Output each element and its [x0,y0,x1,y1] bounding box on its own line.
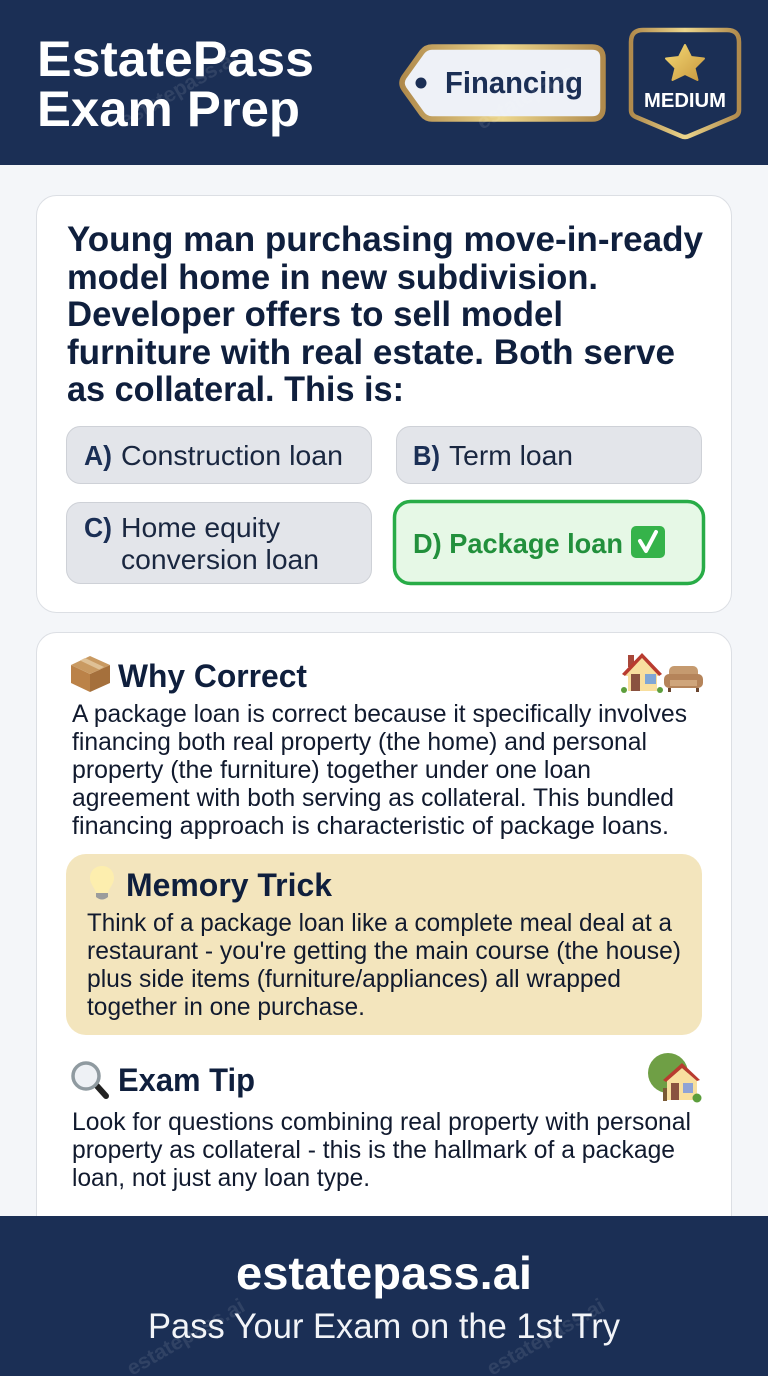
option A [66,426,372,484]
category tag: Financing: Financing [445,65,583,100]
exam tip text [72,1108,691,1192]
question text: Young man purchasing move-in-ready [67,220,704,259]
option A: A) [84,440,112,471]
category tag: Financing [402,47,603,119]
icon: package [71,656,110,692]
memory trick text: plus side items (furniture/appliances) all wrapped [87,965,621,993]
header band: estatepass [473,60,579,134]
why correct text [72,700,687,840]
heading: memory trick: Memory Trick [126,867,332,903]
memory trick text [87,909,681,1021]
icon: sofa [664,666,703,692]
option D: correct answer [394,502,704,584]
question text: as collateral. This is: [67,370,404,409]
header title: Exam Prep [37,81,300,137]
panel: memory trick [66,854,702,1035]
header band [0,0,768,165]
option C: C) [84,512,112,543]
icon: check mark [631,526,665,558]
option D: correct answer: D) Package loan [413,528,623,559]
icon: light bulb [90,866,114,900]
question text: Developer offers to sell model [67,295,563,334]
footer tagline: Pass Your Exam on the 1st Try [148,1307,620,1346]
exam tip text: loan, not just any loan type. [72,1164,370,1192]
question text: furniture with real estate. Both serve [67,333,675,372]
question text [67,220,704,409]
why correct text: agreement with both serving as collateral. This bundled [72,784,674,812]
difficulty badge: medium: MEDIUM [644,90,726,112]
header title: EstatePass [37,31,314,87]
heading: exam tip: Exam Tip [118,1062,255,1098]
exam tip text: Look for questions combining real property with personal [72,1108,691,1136]
why correct text: financing approach is characteristic of package loans. [72,812,669,840]
option A: Construction loan [121,440,343,471]
option B: B) [413,440,440,471]
option C: conversion loan [121,544,319,575]
exam tip text: property as collateral - this is the hallmark of a package [72,1136,675,1164]
heading: why correct: Why Correct [118,658,307,694]
footer site name: estatepass.ai [236,1247,532,1299]
option B: Term loan [449,440,573,471]
option B [396,426,702,484]
panel: explanation [36,632,732,1272]
footer band [0,1216,768,1376]
why correct text: property (the furniture) together under one loan [72,756,591,784]
difficulty badge: medium [631,30,739,137]
icon: house [621,653,663,693]
option C: Home equity [121,512,280,543]
icon: house with tree [648,1053,702,1102]
why correct text: financing both real property (the home) and personal [72,728,647,756]
question text: model home in new subdivision. [67,258,598,297]
header title [37,31,314,137]
option C [66,502,372,584]
memory trick text: together in one purchase. [87,993,365,1021]
icon: magnifying glass [73,1063,106,1096]
header band: estatepass.ai [116,46,242,132]
memory trick text: Think of a package loan like a complete meal deal at a [87,909,672,937]
memory trick text: restaurant - you're getting the main course (the house) [87,937,681,965]
panel: question [36,196,732,612]
why correct text: A package loan is correct because it specifically involves [72,700,687,728]
